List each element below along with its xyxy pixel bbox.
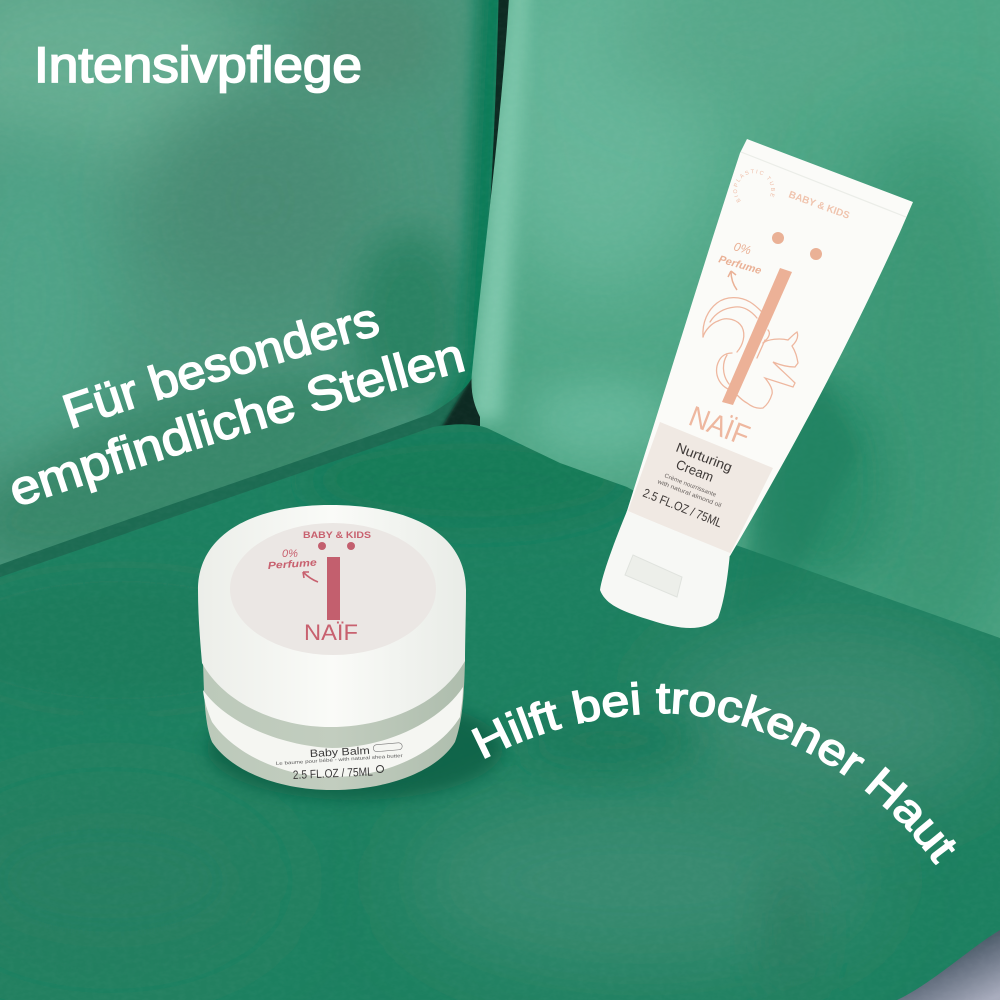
product: baby balm jar: 2.5 FL.OZ / 75ML: [293, 765, 373, 782]
jar label: [203, 687, 463, 777]
cap recess: [625, 555, 682, 597]
jar glass body: [203, 660, 465, 790]
lid text: brand: NAÏF: [304, 620, 358, 645]
tube text: 0% perfume: Perfume: [717, 253, 763, 277]
tube label band: [628, 422, 773, 554]
logo bar: [327, 557, 340, 620]
product: baby balm jar: [198, 505, 466, 790]
logo dots: [318, 542, 355, 550]
tube logo bar: [722, 268, 792, 405]
jar lid: [198, 505, 466, 727]
heading: Intensivpflege: [34, 37, 362, 93]
panel: right back cushion: [470, 0, 1000, 700]
recycling mark: [376, 766, 384, 772]
callout: Hilft bei trockener Haut: Hilft bei trockener Haut: [471, 681, 956, 866]
lid arrow: [303, 572, 318, 582]
tube description: with natural almond oil: [655, 479, 722, 509]
panel: seat cushion: [0, 400, 1000, 1000]
tube body: [626, 139, 913, 556]
tube volume: 2.5 FL.OZ / 75ML: [641, 486, 724, 530]
tube logo dots: [772, 232, 822, 260]
product: nurturing cream tube: [600, 139, 913, 628]
lid text: 0% perfume: Perfume: [267, 558, 318, 572]
product: baby balm jar: Le baume pour bébé - with natural shea butter: [276, 753, 403, 767]
shadow: jar: [207, 696, 503, 800]
tube description: Crème nourrissante: [663, 473, 717, 499]
squirrel illustration: [703, 298, 798, 408]
tube text: bioplastic: BIOPLASTIC TUBE: [733, 169, 775, 202]
floor wedge: [897, 930, 1000, 1000]
tube text: 0% perfume: [717, 239, 763, 277]
panel: left back cushion: [0, 0, 499, 565]
tube description: [655, 473, 722, 509]
lid text: 0% perfume: [267, 548, 318, 572]
tube brand text: NAÏF: [684, 401, 754, 453]
callout: Für besonders empfindliche Stellen: Für besonders: [62, 310, 380, 429]
perfume pill: [373, 742, 402, 752]
tube text: baby and kids: BABY & KIDS: [787, 189, 851, 222]
tube arrow: [728, 271, 737, 290]
tube text: 0% perfume: 0%: [732, 239, 753, 257]
callout: Für besonders empfindliche Stellen: empfindliche Stellen: [12, 346, 465, 504]
shadow: tube: [735, 370, 860, 620]
lid text: baby and kids: BABY & KIDS: [303, 530, 371, 540]
lid text: 0% perfume: 0%: [282, 548, 298, 560]
tube cap: [600, 511, 730, 628]
tube product name: Cream: [674, 457, 716, 485]
jar label text: Baby Balm: [310, 745, 370, 760]
lid top label: [230, 523, 436, 655]
tube crimp line: [741, 152, 906, 217]
tube product name: Nurturing: [674, 440, 734, 475]
